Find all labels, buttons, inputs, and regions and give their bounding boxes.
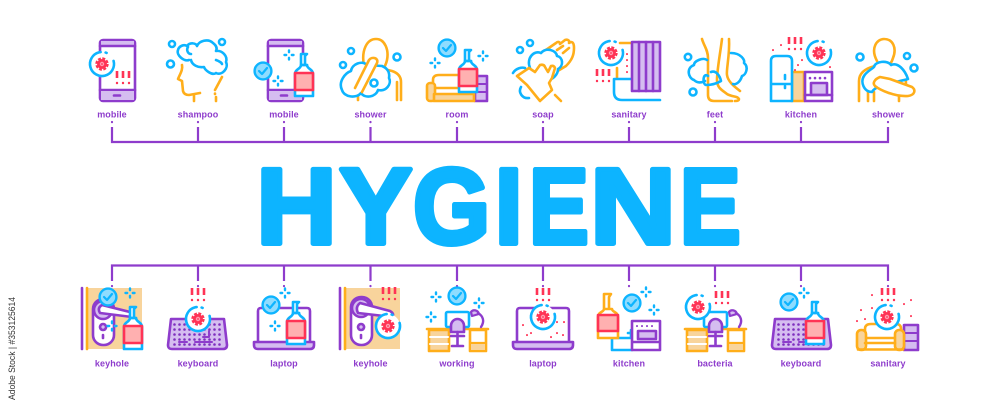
icon: room with spray [427, 40, 488, 101]
top labels: shower [354, 110, 387, 120]
icon: working desk disinfected [426, 288, 488, 351]
bottom labels: keyboard [781, 358, 821, 368]
icon: laptop disinfected [254, 288, 314, 349]
bottom labels: keyhole [353, 358, 388, 368]
bottom labels: sanitary [870, 358, 906, 368]
bottom connector [112, 266, 888, 286]
icon: soap hands [513, 40, 574, 102]
icons group [82, 37, 918, 351]
icon: sanitary curtain [596, 38, 660, 100]
icon: kitchen disinfected [598, 288, 660, 350]
stock credit: Adobe Stock | #353125614 [7, 297, 18, 400]
icon: washing feet [685, 39, 747, 101]
icon: mobile with germ [87, 40, 135, 101]
top labels: shower [872, 110, 904, 120]
bottom labels: keyboard [178, 358, 218, 368]
icon: laptop with germs [513, 288, 573, 349]
bottom labels [95, 358, 906, 368]
bottom labels: kitchen [613, 358, 645, 368]
bottom labels: working [438, 358, 475, 368]
bottom labels: keyhole [95, 358, 129, 368]
title: Y [339, 146, 412, 266]
icon: bacteria on desk [683, 291, 746, 351]
top labels: sanitary [611, 110, 647, 120]
icon: shampoo head [167, 39, 227, 101]
icon: door keyhole with germ [340, 287, 403, 349]
bottom labels: laptop [270, 358, 298, 368]
icon: door keyhole with spray [82, 288, 142, 349]
top labels: room [446, 110, 468, 120]
icon: sofa sanitary [857, 288, 918, 350]
title: E [680, 146, 741, 266]
top labels: kitchen [785, 110, 817, 120]
title: E [529, 146, 589, 266]
top labels [97, 110, 904, 120]
top labels: shampoo [178, 110, 219, 120]
title: G [413, 146, 490, 266]
top connector [112, 122, 888, 142]
top labels: feet [707, 110, 723, 120]
title: N [590, 146, 676, 266]
top labels: mobile [269, 110, 299, 120]
icon: kitchen with germ [771, 37, 834, 101]
top labels: mobile [97, 110, 127, 120]
icon: mobile disinfected [255, 40, 313, 101]
icon: shower front [856, 39, 918, 101]
bottom labels: bacteria [697, 358, 734, 368]
title: H [256, 146, 337, 266]
bottom labels: laptop [529, 358, 557, 368]
icon: keyboard with spray [772, 288, 831, 349]
icon: shower back [340, 39, 401, 100]
title: I [495, 146, 523, 266]
icon: keyboard with germ [168, 288, 227, 349]
top labels: soap [532, 110, 554, 120]
